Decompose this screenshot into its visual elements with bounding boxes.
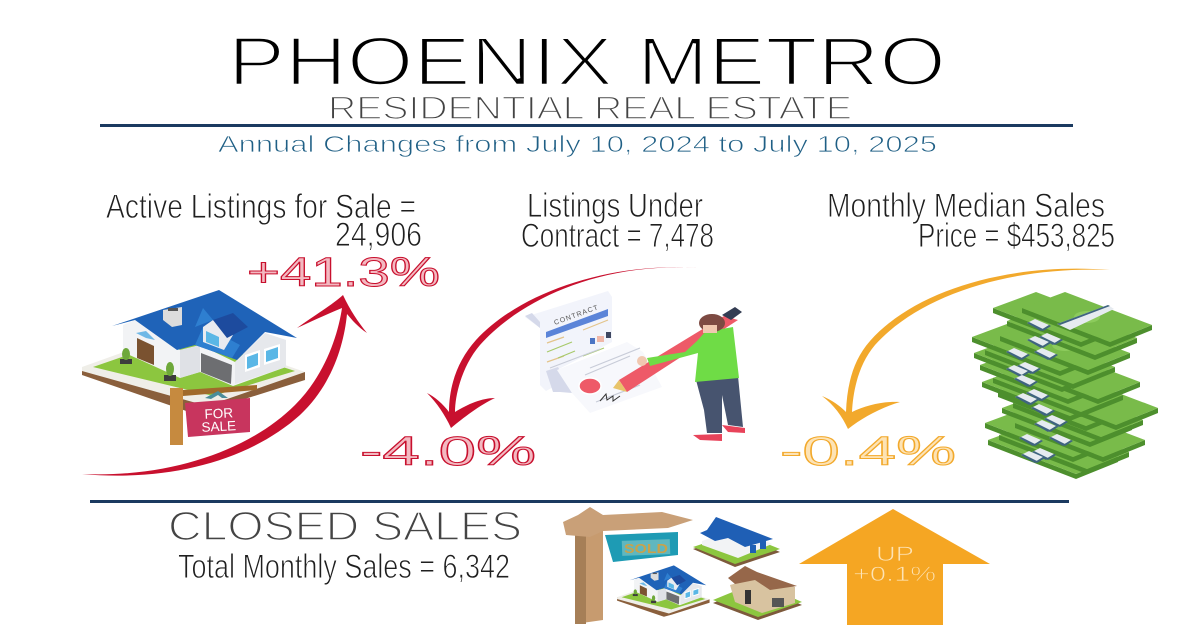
arrow: red down <box>427 267 697 428</box>
text: median price label: Monthly Median Sales <box>827 187 1105 225</box>
for sale sign: FOR <box>204 405 234 422</box>
text: under contract label <box>521 187 714 255</box>
text: under contract label: Listings Under <box>527 187 703 225</box>
icon: sold sign: SOLD <box>624 541 668 556</box>
title: PHOENIX METRO <box>228 23 946 100</box>
date range subtitle: Annual Changes from July 10, 2024 to July 10, 2025 <box>218 131 937 157</box>
icon: contract document: CONTRACT <box>553 304 600 327</box>
text: median price label: Price = $453,825 <box>918 217 1115 255</box>
text: median price label <box>827 187 1115 255</box>
arrow: red up <box>82 295 367 476</box>
subtitle: RESIDENTIAL REAL ESTATE <box>328 90 852 126</box>
panel: active listings <box>82 188 440 476</box>
icon: money stacks <box>972 292 1158 479</box>
arrow: orange up with label: UP <box>876 543 914 566</box>
for sale sign <box>170 385 257 445</box>
icon: small brown house <box>713 566 802 620</box>
top divider <box>100 124 1073 127</box>
bottom divider <box>90 500 1069 503</box>
icon: small blue house <box>693 517 780 567</box>
text: active listings label: 24,906 <box>335 216 422 254</box>
panel: listings under contract <box>360 187 745 474</box>
icon: house for sale <box>82 290 305 445</box>
icon: small blue house two <box>617 565 710 617</box>
percentage: minus 4.0: -4.0% <box>360 428 536 474</box>
text: active listings label <box>106 188 422 254</box>
arrow: orange down <box>822 269 1110 429</box>
percentage: plus 41.3: +41.3% <box>247 249 440 295</box>
arrow: orange up with label: +0.1% <box>853 563 936 586</box>
panel: closed sales <box>168 503 990 625</box>
icon: contract document <box>525 291 662 413</box>
icon: sold sign <box>563 507 693 624</box>
text: active listings label: Active Listings for Sale = <box>106 188 416 226</box>
for sale sign: SALE <box>201 418 236 435</box>
heading: closed sales: CLOSED SALES <box>168 503 522 549</box>
arrow: orange up with label <box>799 509 990 625</box>
text: total monthly sales: Total Monthly Sales = 6,342 <box>178 548 510 586</box>
panel: median sales price <box>780 187 1158 479</box>
text: under contract label: Contract = 7,478 <box>521 217 714 255</box>
icon: person with giant pencil <box>613 307 745 441</box>
percentage: minus 0.4: -0.4% <box>780 428 956 474</box>
